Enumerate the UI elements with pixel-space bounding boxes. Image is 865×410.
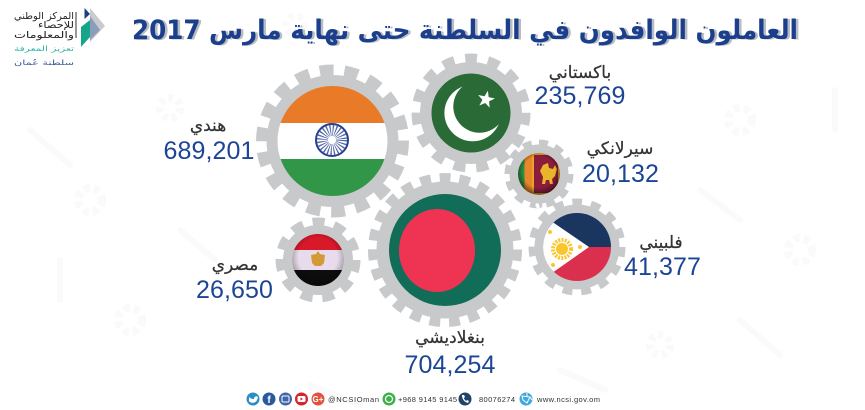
icon: youtube [295,392,308,406]
icon: instagram [279,392,292,406]
label: Egypt: 26,650 [196,276,273,304]
label: Sri Lanka: 20,132 [582,160,659,188]
gear: Pakistan [417,59,525,167]
gear: Bangladesh [374,178,516,322]
footer contacts [246,392,600,406]
handle: @NCSIOman [328,395,379,404]
icon: twitter [246,392,260,406]
icon: facebook: f [267,395,271,406]
icon: google plus [312,392,324,406]
flag: Egypt [292,234,344,286]
phone number: 80076274 [479,395,515,404]
flag: India [277,86,388,197]
label: Egypt: مصري [212,255,258,275]
icon: website globe [520,392,532,406]
logo text: المركز الوطني [14,11,74,22]
flag: Sri Lanka [518,153,560,195]
label: Philippines: 41,377 [624,253,701,281]
gear: Sri Lanka [508,143,570,205]
gear: Philippines [532,202,622,292]
label: India [163,116,255,165]
label: Sri Lanka [582,139,659,188]
label: Bangladesh: بنغلاديشي [415,328,485,348]
gear: Egypt [280,222,356,298]
title: العاملون الوافدون في السلطنة حتى نهاية مارس 2017 [132,15,798,46]
label: Egypt [196,255,273,304]
label: Bangladesh: 704,254 [404,351,496,379]
website: www.ncsi.gov.om [536,395,600,404]
flag: Bangladesh [389,194,501,306]
logo text: للإحصاء [38,20,74,31]
label: Pakistan [534,63,626,110]
logo text [14,11,74,67]
label: Bangladesh [404,328,496,379]
icon: google plus: G+ [313,395,324,404]
label: Pakistan: 235,769 [534,82,626,110]
flag: Philippines [543,213,611,281]
icon: whatsapp [382,392,396,406]
label: India: هندي [190,116,226,136]
icon: phone [458,392,472,406]
label: Philippines [624,233,701,281]
flag: Pakistan [432,74,510,152]
logo mark [76,8,105,47]
label: Sri Lanka: سيرلانكي [587,139,653,159]
whatsapp number: +968 9145 9145 [398,395,457,404]
logo text: سلطنة عُمان [14,58,74,67]
gear: India [262,71,402,211]
logo: NCSI [14,8,105,67]
logo text: تعزيز المعرفة [14,45,74,53]
title: العاملون الوافدون في السلطنة حتى نهاية مارس 2017 [134,16,800,46]
icon: facebook [262,392,276,406]
label: Pakistan: باكستاني [549,63,611,83]
label: Philippines: فلبيني [639,233,683,253]
label: India: 689,201 [163,137,255,165]
logo text: والمعلومات [14,30,74,41]
